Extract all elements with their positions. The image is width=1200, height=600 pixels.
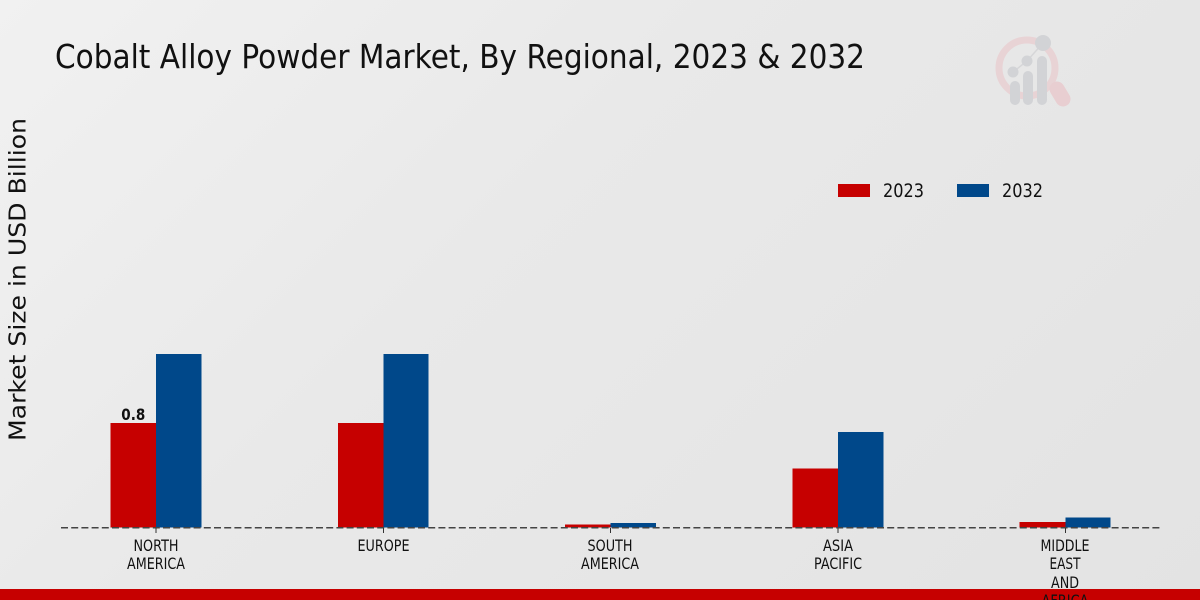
x label: North America: NORTH (134, 536, 178, 555)
data label: 0.8 (121, 405, 145, 424)
x label: Middle East and Africa: MIDDLE (1040, 536, 1090, 555)
legend: 2032 (1002, 181, 1043, 202)
x label: Asia Pacific: PACIFIC (814, 554, 862, 573)
x axis baseline (61, 528, 1160, 533)
bars: Middle East and Africa (1020, 518, 1110, 528)
x label: Middle East and Africa: AND (1051, 573, 1079, 592)
x label: North America (127, 536, 185, 573)
x label: South America: SOUTH (588, 536, 632, 555)
x label: Asia Pacific: ASIA (823, 536, 853, 555)
x label: North America: AMERICA (127, 554, 185, 573)
bars: Europe (338, 354, 428, 528)
legend: 2023 (883, 181, 924, 202)
footer band (0, 589, 1200, 600)
icon: watermark logo (999, 35, 1063, 105)
x label: Middle East and Africa (1040, 536, 1090, 600)
x label: Europe: EUROPE (358, 536, 410, 555)
x label: South America (581, 536, 639, 573)
x label: South America: AMERICA (581, 554, 639, 573)
x label: Asia Pacific (814, 536, 862, 573)
bars: South America (565, 523, 656, 528)
bars: Asia Pacific (792, 432, 884, 528)
legend (838, 181, 1043, 202)
y axis title: Market Size in USD Billion (6, 118, 32, 441)
x label: Middle East and Africa: EAST (1050, 554, 1081, 573)
bars: North America (110, 354, 202, 528)
title: Cobalt Alloy Powder Market, By Regional, 2023 & 2032 (55, 37, 865, 76)
